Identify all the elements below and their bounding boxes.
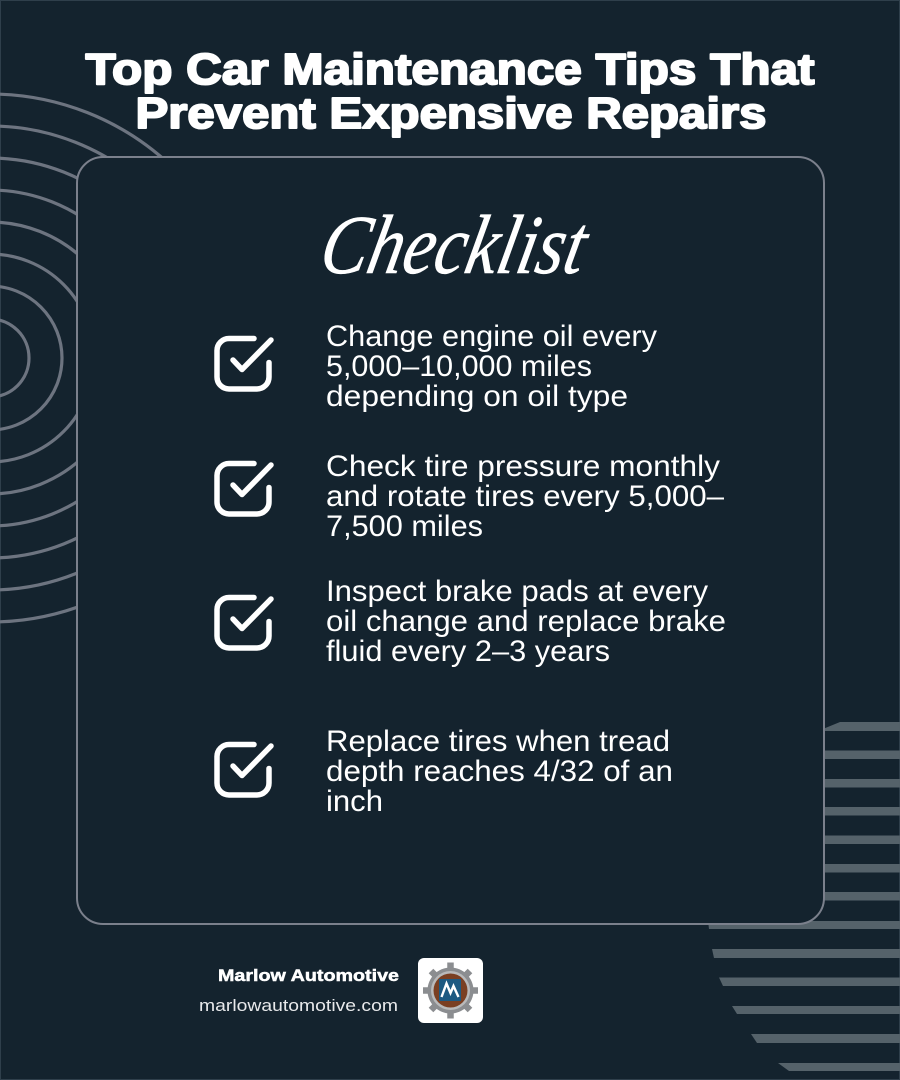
icon: checkbox 2: [217, 464, 271, 514]
title: [86, 45, 815, 138]
text: item 1: 5,000–10,000 miles: [326, 350, 592, 383]
icon: checkbox 3: [217, 598, 271, 648]
decorative concentric arcs: [0, 94, 254, 622]
icon: checkbox 1: [217, 338, 271, 389]
text: item 2: Check tire pressure monthly: [326, 450, 720, 483]
text: item 4: [326, 725, 673, 818]
checklist item 1: [217, 320, 657, 413]
title: Prevent Expensive Repairs: [136, 89, 767, 138]
checklist item 2: [217, 450, 724, 543]
text: item 4: inch: [326, 785, 383, 818]
decorative stripes: [708, 722, 900, 1071]
title: Top Car Maintenance Tips That: [86, 45, 815, 94]
text: item 4: Replace tires when tread: [326, 725, 670, 758]
text: item 2: 7,500 miles: [326, 510, 483, 543]
heading: Checklist: Checklist: [313, 199, 598, 292]
text: item 1: [326, 320, 657, 413]
footer: company name and website: marlowautomotive.com: [199, 997, 398, 1015]
panel: checklist: [77, 157, 824, 924]
text: item 3: oil change and replace brake: [326, 605, 726, 638]
checklist item 3: [217, 575, 726, 668]
footer: company name and website: Marlow Automotive: [218, 966, 399, 985]
text: item 3: fluid every 2–3 years: [326, 635, 610, 668]
footer: company name and website: [199, 966, 399, 1015]
checklist item 4: [217, 725, 673, 818]
icon: Marlow Automotive logo: [418, 958, 483, 1023]
text: item 3: Inspect brake pads at every: [326, 575, 708, 608]
text: item 4: depth reaches 4/32 of an: [326, 755, 673, 788]
text: item 2: and rotate tires every 5,000–: [326, 480, 724, 513]
text: item 2: [326, 450, 724, 543]
text: item 3: [326, 575, 726, 668]
text: item 1: Change engine oil every: [326, 320, 657, 353]
icon: checkbox 4: [217, 744, 271, 795]
text: item 1: depending on oil type: [326, 380, 628, 413]
